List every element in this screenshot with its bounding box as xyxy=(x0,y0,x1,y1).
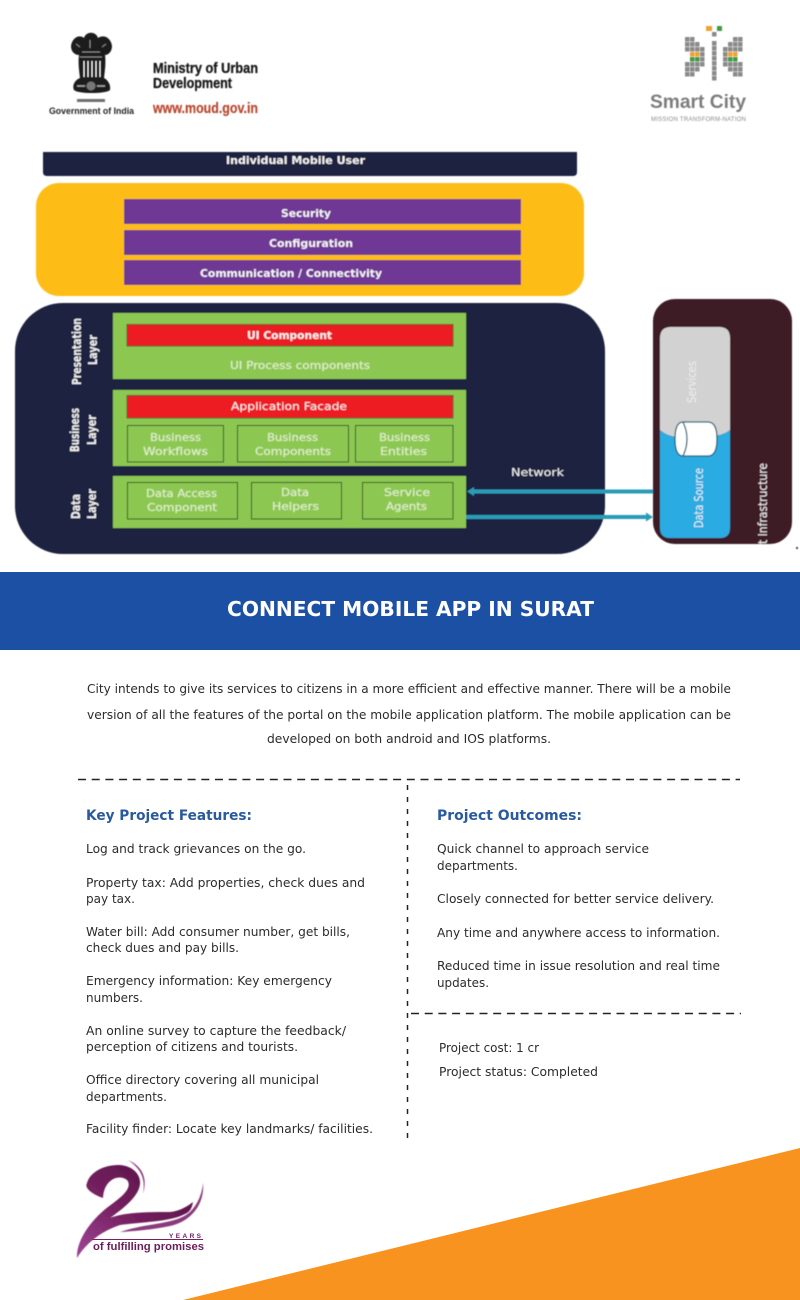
text: ministry website: www.moud.gov.in xyxy=(152,101,258,117)
project cost and status xyxy=(439,1041,598,1079)
box: service agents: Agents xyxy=(386,500,427,513)
text: infrastructure label: t Infrastructure xyxy=(756,463,770,544)
label: presentation layer: Layer xyxy=(86,335,100,365)
panel: project outcomes xyxy=(437,808,720,990)
bar: application facade: Application Facade xyxy=(231,400,347,413)
label: presentation layer: Presentation xyxy=(70,318,84,385)
feature list xyxy=(86,842,373,1136)
label: business layer: Layer xyxy=(85,415,99,445)
panel: business layer xyxy=(113,390,466,466)
outcomes list: updates. xyxy=(437,976,489,990)
feature list: Property tax: Add properties, check dues and xyxy=(86,876,365,890)
box: data helpers: Helpers xyxy=(272,500,319,513)
box: service agents: Service xyxy=(384,486,430,499)
panel: data source: Data Source xyxy=(692,468,706,528)
feature list: Facility finder: Locate key landmarks/ facilities. xyxy=(86,1122,373,1136)
arrow: data source to service agents xyxy=(467,487,653,496)
heading: key project features: Key Project Features: xyxy=(86,808,252,824)
panel: services xyxy=(660,327,730,437)
text: Smart City: Smart City xyxy=(650,92,746,113)
box: business entities: Business xyxy=(379,431,430,444)
icon: Smart City butterfly xyxy=(685,26,742,80)
intro text xyxy=(87,682,731,746)
outcomes list: Quick channel to approach service xyxy=(437,842,649,856)
bar: configuration xyxy=(124,230,521,255)
box: data helpers: Data xyxy=(281,486,309,499)
label: business layer: Business xyxy=(68,408,82,452)
box: data access component: Data Access xyxy=(146,487,217,500)
label: data layer: Data xyxy=(69,494,83,519)
box: business workflows xyxy=(128,426,224,462)
bar: security xyxy=(124,199,521,224)
label: data layer xyxy=(69,489,99,519)
project cost and status: Project cost: 1 cr xyxy=(439,1041,539,1055)
box: business entities: Entities xyxy=(380,445,427,458)
intro text: version of all the features of the portal on the mobile application platform. The mobile application can be xyxy=(87,708,731,722)
box: business components xyxy=(238,426,348,462)
feature list: pay tax. xyxy=(86,892,135,906)
intro text: City intends to give its services to citizens in a more efficient and effective manner. There will be a mobile xyxy=(87,682,731,696)
panel: infrastructure xyxy=(653,299,792,544)
icon: ribbon numeral 2 xyxy=(77,1160,203,1258)
icon: national emblem xyxy=(71,33,112,102)
panel: individual mobile user: Individual Mobile User xyxy=(226,154,366,167)
box: business components: Components xyxy=(255,445,331,458)
header: Smart City logo xyxy=(650,26,746,123)
arrow: service agents to data source xyxy=(466,512,653,522)
panel: individual mobile user xyxy=(43,152,577,176)
bar: UI component: UI Component xyxy=(247,329,332,342)
header: Government of India and Ministry logo xyxy=(49,33,258,117)
panel: key project features xyxy=(86,808,373,1136)
outcomes list: Reduced time in issue resolution and real time xyxy=(437,959,720,973)
feature list: Office directory covering all municipal xyxy=(86,1073,319,1087)
box: business workflows: Workflows xyxy=(143,445,208,458)
box: business entities xyxy=(356,426,453,462)
box: business components: Business xyxy=(267,431,318,444)
panel: data layer xyxy=(113,476,466,528)
text: Ministry of Urban Development: Ministry of Urban xyxy=(153,61,258,77)
feature list: Water bill: Add consumer number, get bills, xyxy=(86,925,350,939)
feature list: Log and track grievances on the go. xyxy=(86,842,306,856)
label: data layer: Layer xyxy=(85,489,99,519)
feature list: numbers. xyxy=(86,991,143,1005)
box: data helpers xyxy=(252,482,342,519)
bar: configuration: Configuration xyxy=(269,237,353,250)
feature list: check dues and pay bills. xyxy=(86,941,239,955)
text: Ministry of Urban Development: Development xyxy=(153,76,232,92)
bar: security: Security xyxy=(281,207,331,220)
logo: 2 years of fulfilling promises xyxy=(77,1160,204,1258)
bar: application facade xyxy=(127,396,453,418)
panel: presentation layer xyxy=(113,313,466,379)
panel: application layers xyxy=(15,303,605,554)
box: service agents xyxy=(362,482,453,519)
feature list: perception of citizens and tourists. xyxy=(86,1040,298,1054)
intro text: developed on both android and IOS platforms. xyxy=(267,732,551,746)
title banner xyxy=(0,572,800,650)
text: years: YEARS xyxy=(169,1233,202,1240)
title banner: CONNECT MOBILE APP IN SURAT xyxy=(227,597,594,621)
heading: project outcomes: Project Outcomes: xyxy=(437,808,582,824)
box: business workflows: Business xyxy=(150,431,201,444)
feature list: departments. xyxy=(86,1090,167,1104)
panel: cross-cutting concerns xyxy=(36,183,584,296)
icon: database cylinder xyxy=(675,422,717,456)
outcomes list: Closely connected for better service delivery. xyxy=(437,892,714,906)
architecture diagram xyxy=(15,152,798,554)
project cost and status: Project status: Completed xyxy=(439,1065,598,1079)
panel: data source xyxy=(660,430,730,538)
box: data access component xyxy=(128,482,238,519)
feature list: An online survey to capture the feedback/ xyxy=(86,1024,347,1038)
text: Ministry of Urban Development xyxy=(153,61,258,92)
outcomes list: Any time and anywhere access to information. xyxy=(437,926,720,940)
text: network: Network xyxy=(511,466,565,479)
text: of fulfilling promises: of fulfilling promises xyxy=(93,1241,204,1253)
bar: communication and connectivity: Communication / Connectivity xyxy=(200,267,382,280)
text: UI process components: UI Process components xyxy=(230,359,370,372)
outcomes list: departments. xyxy=(437,859,518,873)
feature list: Emergency information: Key emergency xyxy=(86,974,332,988)
box: data access component: Component xyxy=(147,501,218,514)
label: presentation layer xyxy=(70,318,100,385)
bar: communication and connectivity xyxy=(124,260,521,285)
bar: UI component xyxy=(127,324,453,346)
text: Government of India: Government of India xyxy=(49,106,135,116)
decorative orange corner xyxy=(183,1148,800,1300)
outcomes list xyxy=(437,842,720,990)
panel: services: Services xyxy=(685,361,699,403)
text: Mission Transform-Nation: MISSION TRANSFORM-NATION xyxy=(651,117,746,123)
label: business layer xyxy=(68,408,99,452)
